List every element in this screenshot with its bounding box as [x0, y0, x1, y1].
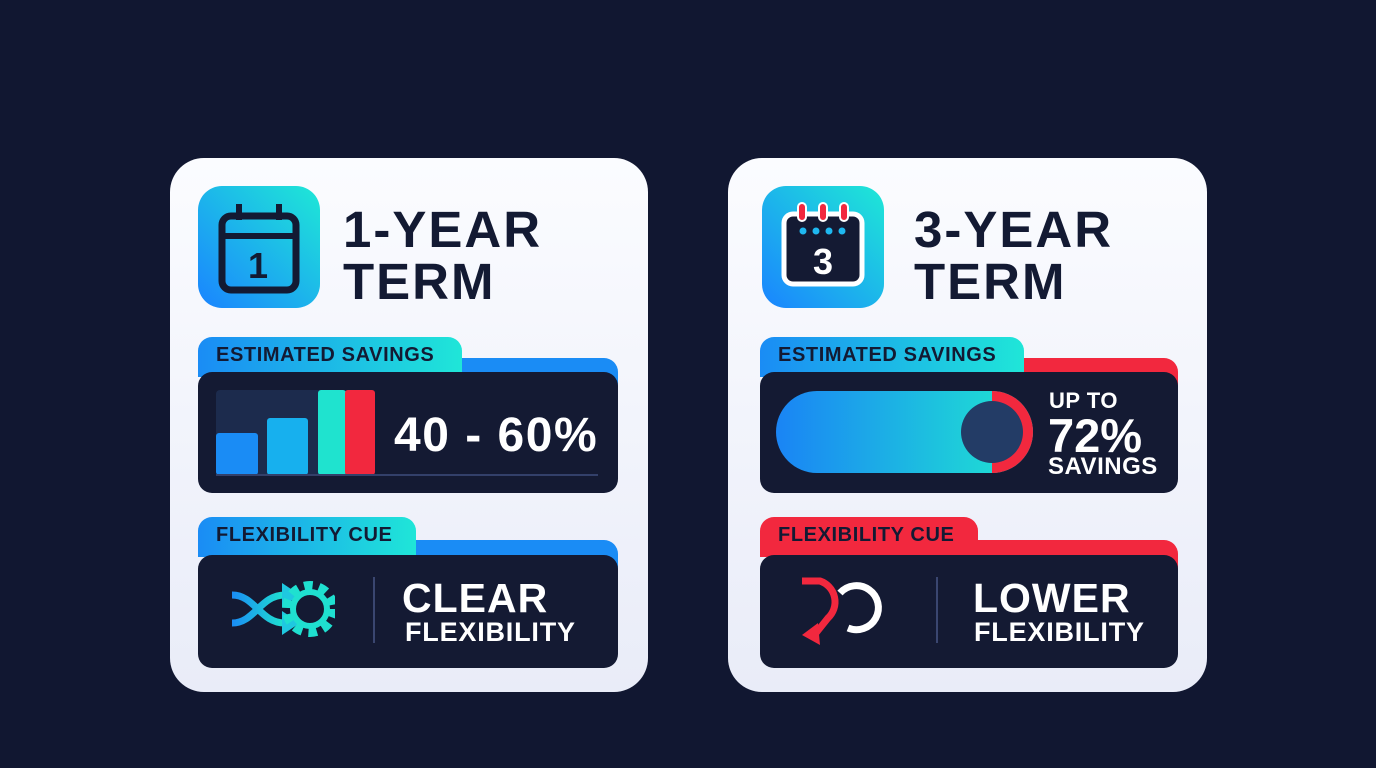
panel: estimated savings: 72%	[1048, 409, 1142, 462]
title: TERM	[914, 253, 1066, 310]
savings value: UP TO	[1049, 388, 1118, 413]
title: 1-YEAR	[343, 201, 542, 258]
panel: estimated savings: SAVINGS	[1048, 453, 1158, 480]
title: 3-YEAR	[914, 201, 1113, 258]
title	[914, 201, 1113, 310]
card: 3-year term	[728, 158, 1207, 692]
text: lower flexibility: LOWER	[973, 575, 1131, 621]
tab label: ESTIMATED SAVINGS	[778, 344, 996, 366]
panel: estimated savings	[198, 337, 618, 493]
tab label: ESTIMATED SAVINGS	[216, 344, 434, 366]
tab label: FLEXIBILITY CUE	[216, 524, 392, 546]
panel: flexibility cue	[198, 517, 618, 668]
card: 1-year term	[170, 158, 648, 692]
progress pill	[776, 391, 1033, 473]
tab label	[198, 337, 462, 377]
tab label	[760, 337, 1024, 377]
icon: calendar 1	[198, 186, 320, 308]
savings value: 40 - 60%	[394, 409, 598, 462]
icon: calendar 3: 3	[813, 241, 833, 282]
tab label: FLEXIBILITY CUE	[778, 524, 954, 546]
text: clear flexibility: CLEAR	[402, 575, 548, 621]
panel: flexibility cue: FLEXIBILITY	[974, 617, 1145, 647]
tab label	[198, 517, 416, 557]
title	[343, 201, 542, 310]
bar chart	[216, 390, 598, 476]
icon: shuffle gear	[232, 581, 335, 637]
tab label	[760, 517, 978, 557]
panel: flexibility cue: FLEXIBILITY	[405, 617, 576, 647]
icon: calendar 3	[762, 186, 884, 308]
panel: estimated savings	[760, 337, 1178, 493]
icon: restricted loop	[802, 578, 882, 645]
title: TERM	[343, 253, 495, 310]
panel: flexibility cue	[760, 517, 1178, 668]
icon: calendar 1: 1	[248, 245, 268, 286]
